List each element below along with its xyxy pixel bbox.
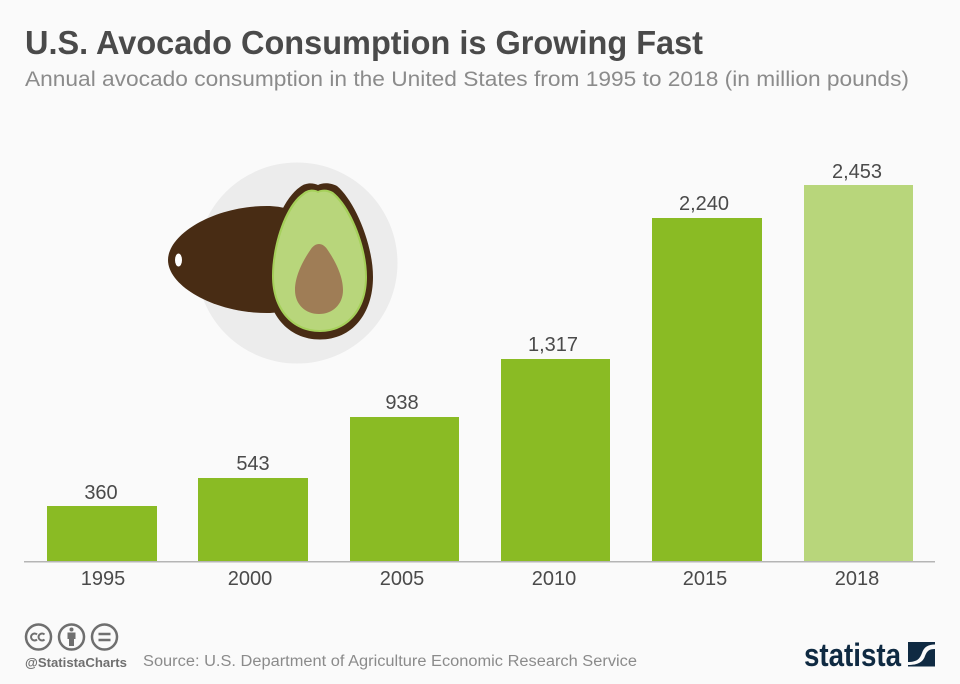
bar chart (24, 161, 935, 590)
source: Source: U.S. Department of Agriculture Economic Research Service (143, 653, 637, 670)
handle: @StatistaCharts (25, 656, 127, 670)
bar: 2000: 543 (236, 453, 270, 475)
bar: 1995: 1995 (81, 568, 125, 590)
bar: 2018: 2,453 (832, 161, 882, 183)
bar: 2015: 2,240 (679, 193, 729, 215)
subtitle: Annual avocado consumption in the United States from 1995 to 2018 (in million pounds) (25, 67, 909, 91)
bar: 2000 (198, 453, 308, 590)
axis line (24, 561, 935, 562)
bar: 2015 (652, 193, 762, 590)
bar: 2005: 938 (385, 392, 419, 414)
bar: 2010 (501, 334, 610, 590)
bar: 2018 (804, 161, 913, 590)
logo: statista: statista (804, 637, 901, 673)
bar: 2010: 2010 (532, 568, 576, 590)
bar: 2005: 2005 (380, 568, 424, 590)
bar: 2015: 2015 (683, 568, 727, 590)
bar: 1995: 360 (84, 482, 118, 504)
icon: creative commons licence (26, 624, 117, 650)
bar: 2000: 2000 (228, 568, 272, 590)
bar: 1995 (47, 482, 157, 590)
icon: avocado illustration (168, 162, 398, 364)
bar: 2005 (350, 392, 459, 590)
title: U.S. Avocado Consumption is Growing Fast (25, 24, 703, 61)
bar: 2010: 1,317 (528, 334, 578, 356)
bar: 2018: 2018 (835, 568, 879, 590)
